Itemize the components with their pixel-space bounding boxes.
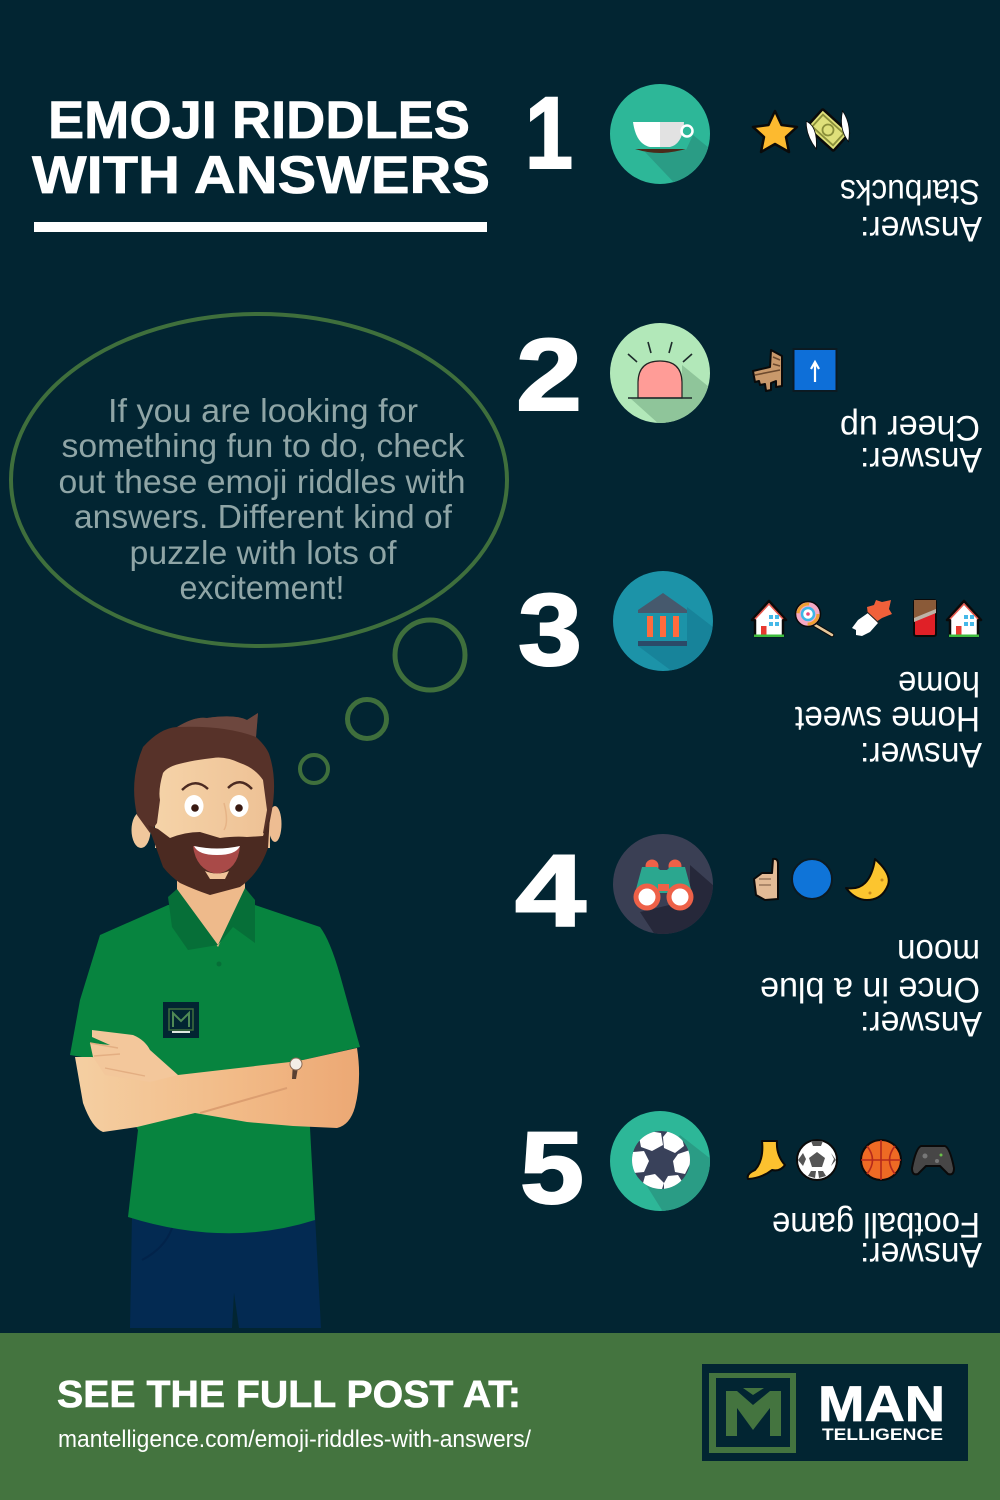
step 3 answer: Home sweet	[795, 699, 980, 738]
step 2 number: 2	[516, 318, 582, 432]
step 5 icon: football	[610, 1111, 710, 1211]
bubble text: answers. Different kind of	[74, 498, 453, 535]
trousers	[130, 1215, 321, 1328]
step 1 answer: Answer:	[860, 209, 982, 248]
bubble text: excitement!	[180, 569, 344, 606]
hair	[134, 713, 274, 836]
step 5 answer	[772, 1205, 982, 1274]
step 2 answer: Answer:	[860, 440, 982, 479]
step 4 answer: Answer:	[860, 1004, 982, 1043]
step 3 answer	[795, 664, 982, 774]
step 3 number: 3	[518, 573, 582, 687]
logo	[702, 1364, 968, 1461]
logo: TELLIGENCE	[822, 1426, 943, 1444]
eyes	[184, 795, 204, 817]
step 1 emoji: star	[753, 111, 797, 152]
footer url: mantelligence.com/emoji-riddles-with-answers/	[58, 1426, 531, 1453]
step 5 emoji: basketball	[861, 1140, 901, 1180]
step 4 emoji: blue circle	[792, 859, 832, 899]
step 3 answer: home	[898, 664, 980, 703]
eyebrows	[182, 782, 252, 790]
step 3 emoji: house	[752, 601, 786, 637]
step 5 emoji: soccer ball	[797, 1140, 837, 1180]
title underline	[34, 222, 487, 232]
bubble text: something fun to do, check	[62, 427, 465, 464]
step 4 answer: Once in a blue	[760, 970, 980, 1009]
ears	[132, 812, 150, 848]
nose	[224, 803, 226, 830]
step 3 icon: bank building	[613, 571, 713, 671]
step 1 number: 1	[525, 76, 573, 190]
shirt	[70, 905, 360, 1233]
step 5 answer: Answer:	[860, 1235, 982, 1274]
step 2 emoji: up arrow sign	[794, 349, 836, 391]
face	[155, 752, 270, 848]
step 1 answer	[840, 172, 982, 248]
step 2 icon: alarm light	[610, 323, 710, 423]
step 5 number: 5	[520, 1111, 584, 1225]
title	[32, 91, 490, 205]
step 3 emoji: house	[947, 601, 981, 637]
step 4 number: 4	[515, 834, 586, 948]
title: EMOJI RIDDLES	[48, 91, 470, 150]
step 4 icon: binoculars	[613, 834, 713, 934]
step 4 answer	[760, 932, 982, 1043]
bubble text: If you are looking for	[108, 392, 418, 429]
logo: MAN	[818, 1376, 945, 1432]
step 5 emoji: foot	[748, 1141, 785, 1179]
mouth	[193, 846, 240, 874]
step 2 answer	[840, 408, 982, 479]
thought bubble	[11, 314, 507, 646]
footer heading: SEE THE FULL POST AT:	[57, 1374, 521, 1416]
beard	[148, 815, 270, 895]
step 3 answer: Answer:	[860, 735, 982, 774]
bubble text: puzzle with lots of	[130, 534, 397, 571]
step 3 emoji: lollipop	[796, 602, 832, 635]
shirt logo badge	[163, 1002, 199, 1038]
step 5 emoji: game controller	[912, 1146, 954, 1174]
step 4 emoji: pointing finger	[754, 859, 778, 900]
step 1 answer: Starbucks	[840, 172, 980, 211]
step 1 emoji: money with wings	[797, 97, 861, 162]
step 3 emoji: candy	[852, 600, 892, 636]
thought bubble trail circles	[300, 620, 465, 783]
neck	[177, 880, 245, 947]
step 2 answer: Cheer up	[840, 408, 980, 447]
bubble text: out these emoji riddles with	[58, 463, 466, 500]
crossed arms	[75, 1048, 359, 1132]
step 1 icon: coffee cup	[610, 84, 710, 184]
title: WITH ANSWERS	[32, 146, 490, 205]
bubble text	[58, 392, 466, 606]
footer band	[0, 1333, 1000, 1500]
step 4 answer: moon	[897, 932, 980, 971]
step 4 emoji: crescent moon	[846, 859, 889, 900]
character: bearded man in green polo	[70, 713, 360, 1328]
wristwatch	[292, 1062, 299, 1079]
step 5 answer: Football game	[772, 1205, 980, 1244]
collar	[168, 888, 255, 950]
hand	[90, 1030, 178, 1082]
step 2 emoji: chair	[753, 350, 782, 391]
step 3 emoji: chocolate bar	[914, 600, 936, 636]
